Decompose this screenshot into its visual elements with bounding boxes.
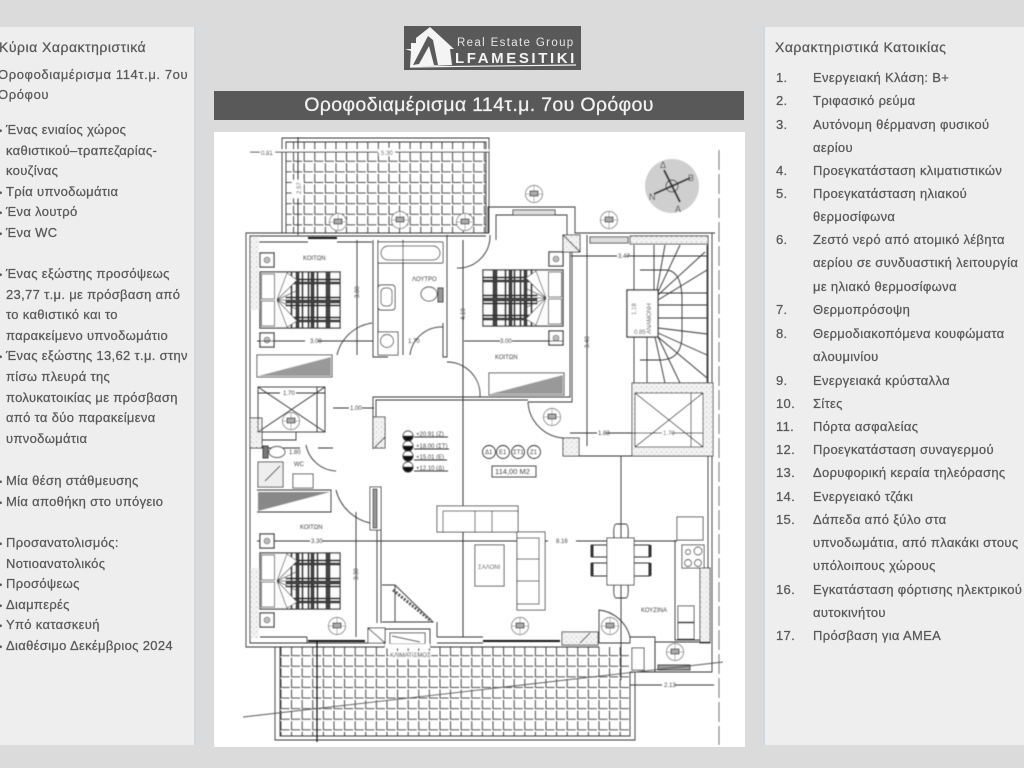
bedroom south [251,487,677,638]
stairwell and shaft: 1.73 [663,431,675,437]
list: rooms: Τρία υπνοδωμάτια [6,184,118,199]
stairwell and shaft: ΑΝΑΜΟΝΗ [647,303,653,334]
list: feature items: Προεγκατάσταση συναγερμού [813,442,994,457]
level markers: +12.10 (Δ) [416,466,444,472]
list: numbers: 7. [776,302,788,317]
list: feature items: Ενεργειακή Κλάση: Β+ [813,70,949,85]
closet: 1.00 [350,406,362,412]
stairwell and shaft [528,235,713,456]
area labels: Ε1 [499,450,507,456]
WC [257,432,336,488]
list: feature items: Προεγκατάσταση ηλιακού [813,186,967,201]
compass: Β [688,173,694,183]
list: balconies: Ένας εξώστης 13,62 τ.μ. στην [6,348,188,363]
list: feature items: θερμοσίφωνα [813,209,895,224]
list: balconies: παρακείμενο υπνοδωμάτιο [6,328,168,343]
title bar [214,91,744,120]
dining table [591,524,650,598]
list: feature items: Εγκατάσταση φόρτισης ηλεκτρικού [813,582,1022,597]
list: numbers: 1. [776,70,788,85]
compass: Ν [649,192,656,202]
bedroom south: 3.30 [354,568,360,580]
area labels: 114,00 M2 [495,467,530,476]
list: feature items: Ενεργειακό τζάκι [813,489,913,504]
compass [645,159,699,214]
list: parking and storage: Μία αποθήκη στο υπόγειο [6,494,163,509]
list: feature items: Θερμοπρόσοψη [813,302,910,317]
list: feature items: Ζεστό νερό από ατομικό λέβητα [813,232,1005,247]
top balcony: 5.30 [381,151,393,157]
list: feature items [812,70,1022,643]
WC: WC [294,462,305,468]
level markers: +20.91 (Ζ) [416,432,444,438]
compass: Δ [660,160,666,170]
list: feature items: Προεγκατάσταση κλιματιστικών [813,163,1002,178]
closet: 1.70 [283,391,295,397]
list: numbers: 2. [776,93,788,108]
list: numbers: 15. [776,512,795,527]
list: rooms: Ένα λουτρό [6,204,78,219]
list: orientation and availability: Προσανατολισμός: [6,535,119,550]
list: feature items: Αυτόνομη θέρμανση φυσικού [813,117,989,132]
list: feature items: υπόλοιπους χώρους [813,558,936,573]
list: balconies: Ένας εξώστης προσόψεως [6,266,170,281]
bottom balcony: ΚΛΙΜΑΤΙΣΜΟΣ [390,653,431,659]
panel: home features [765,27,1024,745]
stairwell and shaft: 1.18 [632,303,638,315]
area labels [482,446,621,680]
list: feature items: Πόρτα ασφαλείας [813,419,918,434]
text: apartment type [0,67,188,102]
logo [404,26,581,70]
list: numbers: 11. [776,419,794,434]
text: alfamesitiki: LFAMESITIKI [455,50,577,67]
list: balconies: πίσω πλευρά της [6,369,110,384]
list: feature items: Τριφασικό ρεύμα [813,93,916,108]
heading: home features: Χαρακτηριστικά Κατοικίας [775,39,946,55]
list: parking and storage: Μία θέση στάθμευσης [6,473,139,488]
list: numbers: 9. [776,373,788,388]
bedroom north-east [464,252,564,395]
interior hall walls: 4.10 [461,308,467,320]
list: balconies: πολυκατοικίας με πρόσβαση [6,390,178,405]
stairwell and shaft: 1.83 [598,431,610,437]
title bar: Οροφοδιαμέρισμα 114τ.μ. 7ου Ορόφου [304,94,654,116]
list: numbers: 16. [776,582,795,597]
list: rooms: καθιστικού–τραπεζαρίας- [6,143,157,158]
list: numbers: 6. [776,232,788,247]
stairwell and shaft: 3.47 [618,254,630,260]
list: feature items: αερίου σε συνδυαστική λειτουργία [813,255,1018,270]
list: balconies: 23,77 τ.μ. με πρόσβαση από [6,287,180,302]
list: feature items: Πρόσβαση για ΑΜΕΑ [813,628,941,643]
icon: house with A [405,27,576,67]
list: numbers: 12. [776,442,795,457]
text: apartment type: Οροφοδιαμέρισμα 114τ.μ. 7ου [0,67,188,82]
level markers: +18.00 (ΣΤ) [416,444,448,450]
list: balconies [0,266,188,446]
top balcony: 0.81 [261,151,273,157]
interior hall walls [373,235,572,637]
living room furniture [437,506,545,610]
bedroom north-west: 3.80 [355,286,361,298]
list: balconies: υπνοδωμάτια [6,431,87,446]
level markers: +15.01 (Ε) [416,455,444,461]
bedroom north-west: ΚΟΙΤΩΝ [303,256,326,262]
list: balconies: από τα δύο παρακείμενα [6,410,156,425]
area labels: ΣΤ1 [513,450,524,456]
list: orientation and availability: Διαθέσιμο Δεκέμβριος 2024 [6,638,173,653]
list: feature items: Δορυφορική κεραία τηλεόρασης [813,465,1005,480]
level markers [403,431,449,472]
bathroom [373,235,447,357]
list: feature items: αερίου [813,140,853,155]
list: numbers: 4. [776,163,788,178]
list: numbers: 10. [776,396,795,411]
list: orientation and availability: Προσόψεως [6,576,80,591]
bedroom north-east: 3.00 [500,339,512,345]
list: numbers: 8. [776,326,788,341]
panel: main features [0,27,194,745]
closet [258,387,374,432]
bedroom south: 3.30 [311,539,323,545]
list: numbers [776,70,795,643]
list: rooms: Ένας ενιαίος χώρος [6,122,126,137]
list: feature items: Ενεργειακά κρύσταλλα [813,373,950,388]
fireplace and south wall [260,585,598,647]
bedroom north-east: ΚΟΙΤΩΝ [495,355,518,361]
plan sheet [214,132,745,747]
outer walls [246,150,719,745]
list: rooms [0,122,157,240]
list: orientation and availability: Νοτιοανατολικός [6,556,105,571]
list: rooms: κουζίνας [6,163,58,178]
bathroom: 1.70 [408,339,420,345]
list: numbers: 3. [776,117,788,132]
area labels: Δ1 [485,450,493,456]
bottom balcony [243,642,723,742]
stairwell and shaft: 3.40 [585,336,591,348]
list: feature items: Δάπεδα από ξύλο στα [813,512,946,527]
kitchen [599,517,714,689]
bedroom south: 8.16 [556,539,568,545]
kitchen: ΚΟΥΖΙΝΑ [641,608,667,614]
stairwell and shaft: 0.85 [634,330,646,336]
list: numbers: 17. [776,628,795,643]
list: feature items: αυτοκινήτου [813,605,886,620]
list: feature items: Σίτες [813,396,843,411]
top balcony: 2.57 [297,182,303,194]
list: feature items: με ηλιακό θερμοσίφωνα [813,279,957,294]
WC: 1.80 [289,450,301,456]
list: orientation and availability: Υπό κατασκευή [6,617,100,632]
list: orientation and availability: Διαμπερές [6,597,70,612]
area labels: Ζ1 [530,450,538,456]
heading: main features: Κύρια Χαρακτηριστικά [0,39,146,55]
kitchen: 2.13 [664,683,676,689]
bathroom: ΛΟΥΤΡΟ [412,277,437,283]
living room furniture: ΣΑΛΟΝΙ [478,565,501,571]
list: balconies: το καθιστικό και το [6,307,118,322]
list: feature items: αλουμινίου [813,349,879,364]
list: parking and storage [0,473,163,509]
top balcony [247,137,489,235]
list: numbers: 13. [776,465,795,480]
bedroom north-west: 3.00 [310,339,322,345]
list: orientation and availability [0,535,173,653]
list: numbers: 14. [776,489,795,504]
list: numbers: 5. [776,186,788,201]
text: real estate group: Real Estate Group [457,37,575,49]
list: feature items: υπνοδωμάτια, από πλακάκι στους [813,535,1018,550]
bedroom south: ΚΟΙΤΩΝ [300,525,323,531]
compass: Α [675,204,681,214]
list: feature items: Θερμοδιακοπόμενα κουφώματα [813,326,1004,341]
section markers [282,186,684,660]
bedroom north-west [257,240,373,377]
list: rooms: Ένα WC [6,225,57,240]
